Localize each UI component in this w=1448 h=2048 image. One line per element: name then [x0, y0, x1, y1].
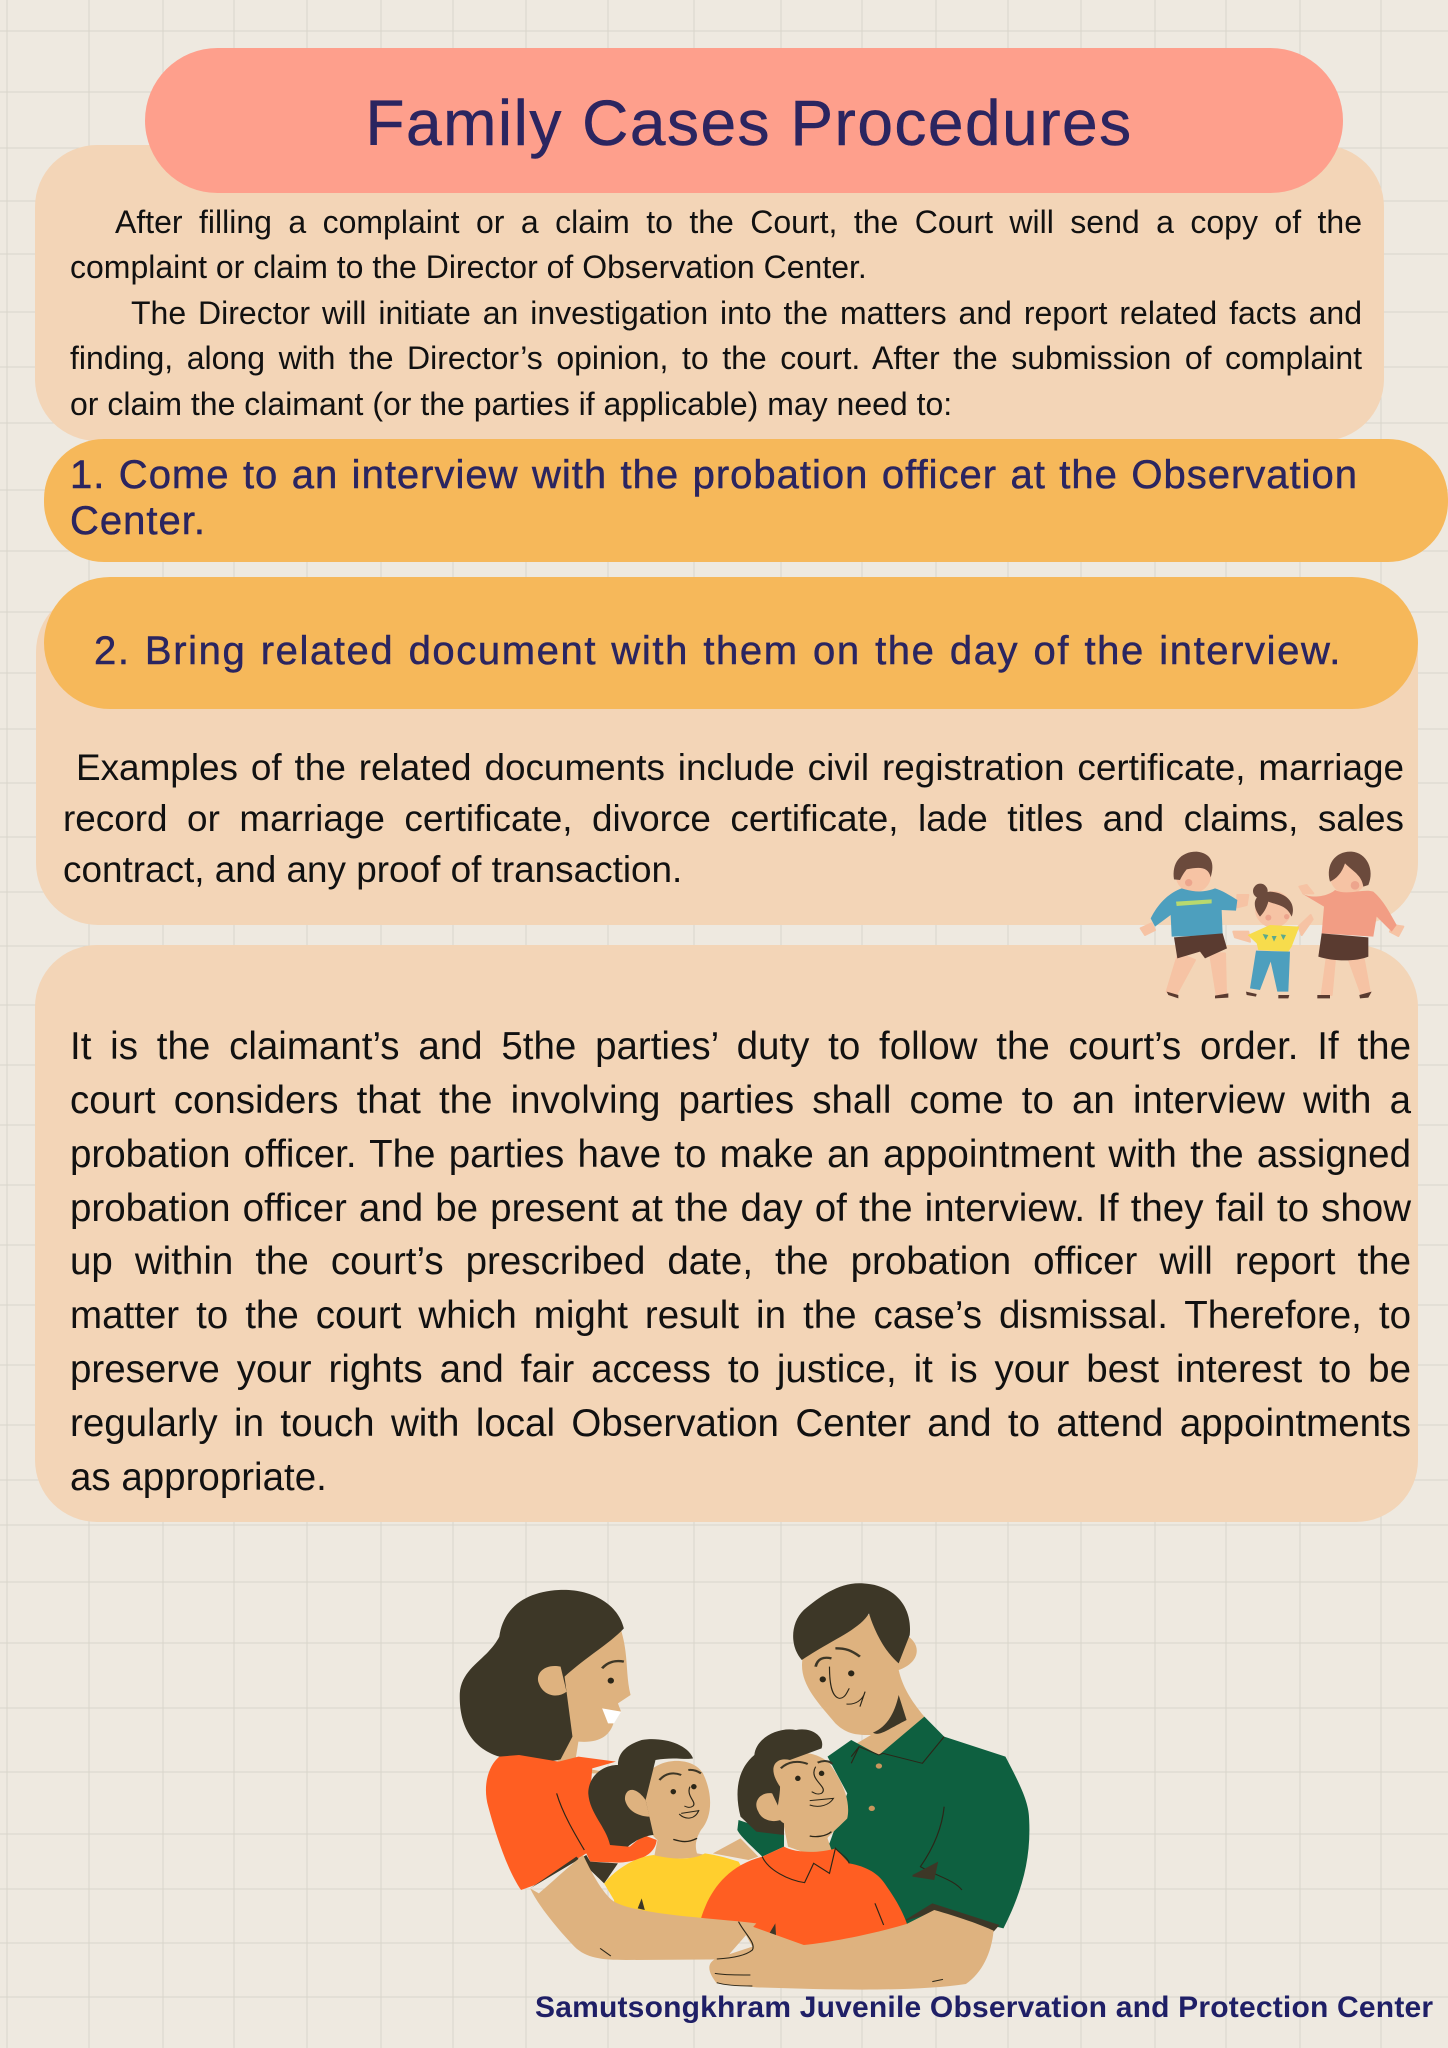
illustration: family embracing: [460, 1583, 1030, 1990]
text block: related documents: contract, and any proof of transaction.: [63, 849, 682, 890]
step 1 text: [70, 453, 1358, 543]
mother: [460, 1590, 657, 1890]
title: Family Cases Procedures: [365, 87, 1133, 159]
step 2 banner: [44, 577, 1418, 709]
illustration: small family holding hands: [1140, 852, 1404, 998]
text block: duty to attend: probation officer. The parties have to make an appointment with the assigned: [70, 1133, 1411, 1176]
text block: duty to attend: It is the claimant’s and 5the parties’ duty to follow the court’s order. If the: [70, 1025, 1411, 1068]
text block: duty to attend: [70, 1025, 1412, 1499]
footer: organisation name: Samutsongkhram Juvenile Observation and Protection Center: [535, 1991, 1433, 2024]
text block: introduction: The Director will initiate an investigation into the matters and report related facts and: [131, 294, 1362, 330]
text block: duty to attend: up within the court’s prescribed date, the probation officer will report the: [70, 1240, 1411, 1283]
step 1 text: 1. Come to an interview with the probation officer at the Observation: [70, 453, 1358, 497]
text block: introduction: After filling a complaint or a claim to the Court, the Court will send a copy of the: [115, 204, 1362, 240]
text block: duty to attend: matter to the court which might result in the case’s dismissal. Therefore, to: [70, 1294, 1411, 1337]
step 1 text: Center.: [70, 499, 206, 543]
text block: duty to attend: probation officer and be present at the day of the interview. If they fail to show: [70, 1187, 1411, 1230]
text block: duty to attend: court considers that the involving parties shall come to an interview with a: [70, 1079, 1411, 1122]
text block: duty to attend: preserve your rights and fair access to justice, it is your best interest to be: [70, 1348, 1411, 1391]
text block: introduction: or claim the claimant (or the parties if applicable) may need to:: [70, 386, 952, 422]
panel: duty to attend background: [35, 945, 1418, 1522]
panel: related documents background: [36, 590, 1418, 925]
boy: [701, 1729, 907, 1947]
text block: related documents: Examples of the related documents include civil registration certificate, marriage: [76, 747, 1404, 788]
text block: duty to attend: as appropriate.: [70, 1456, 327, 1499]
step 2 text: 2. Bring related document with them on the day of the interview.: [94, 629, 1342, 673]
text block: introduction: complaint or claim to the Director of Observation Center.: [70, 249, 867, 285]
text block: duty to attend: regularly in touch with local Observation Center and to attend appointments: [70, 1402, 1411, 1445]
text block: introduction: [70, 204, 1362, 422]
text block: related documents: [63, 747, 1404, 890]
step 1 banner: [44, 439, 1448, 562]
title banner: [145, 48, 1343, 193]
panel: introduction background: [35, 145, 1384, 441]
text block: related documents: record or marriage certificate, divorce certificate, lade titles and claims, sales: [63, 798, 1404, 839]
father: [713, 1583, 1029, 1932]
text block: introduction: finding, along with the Director’s opinion, to the court. After the submission of complaint: [70, 340, 1362, 376]
girl: [588, 1739, 756, 1933]
embracing arms: [530, 1855, 994, 1990]
